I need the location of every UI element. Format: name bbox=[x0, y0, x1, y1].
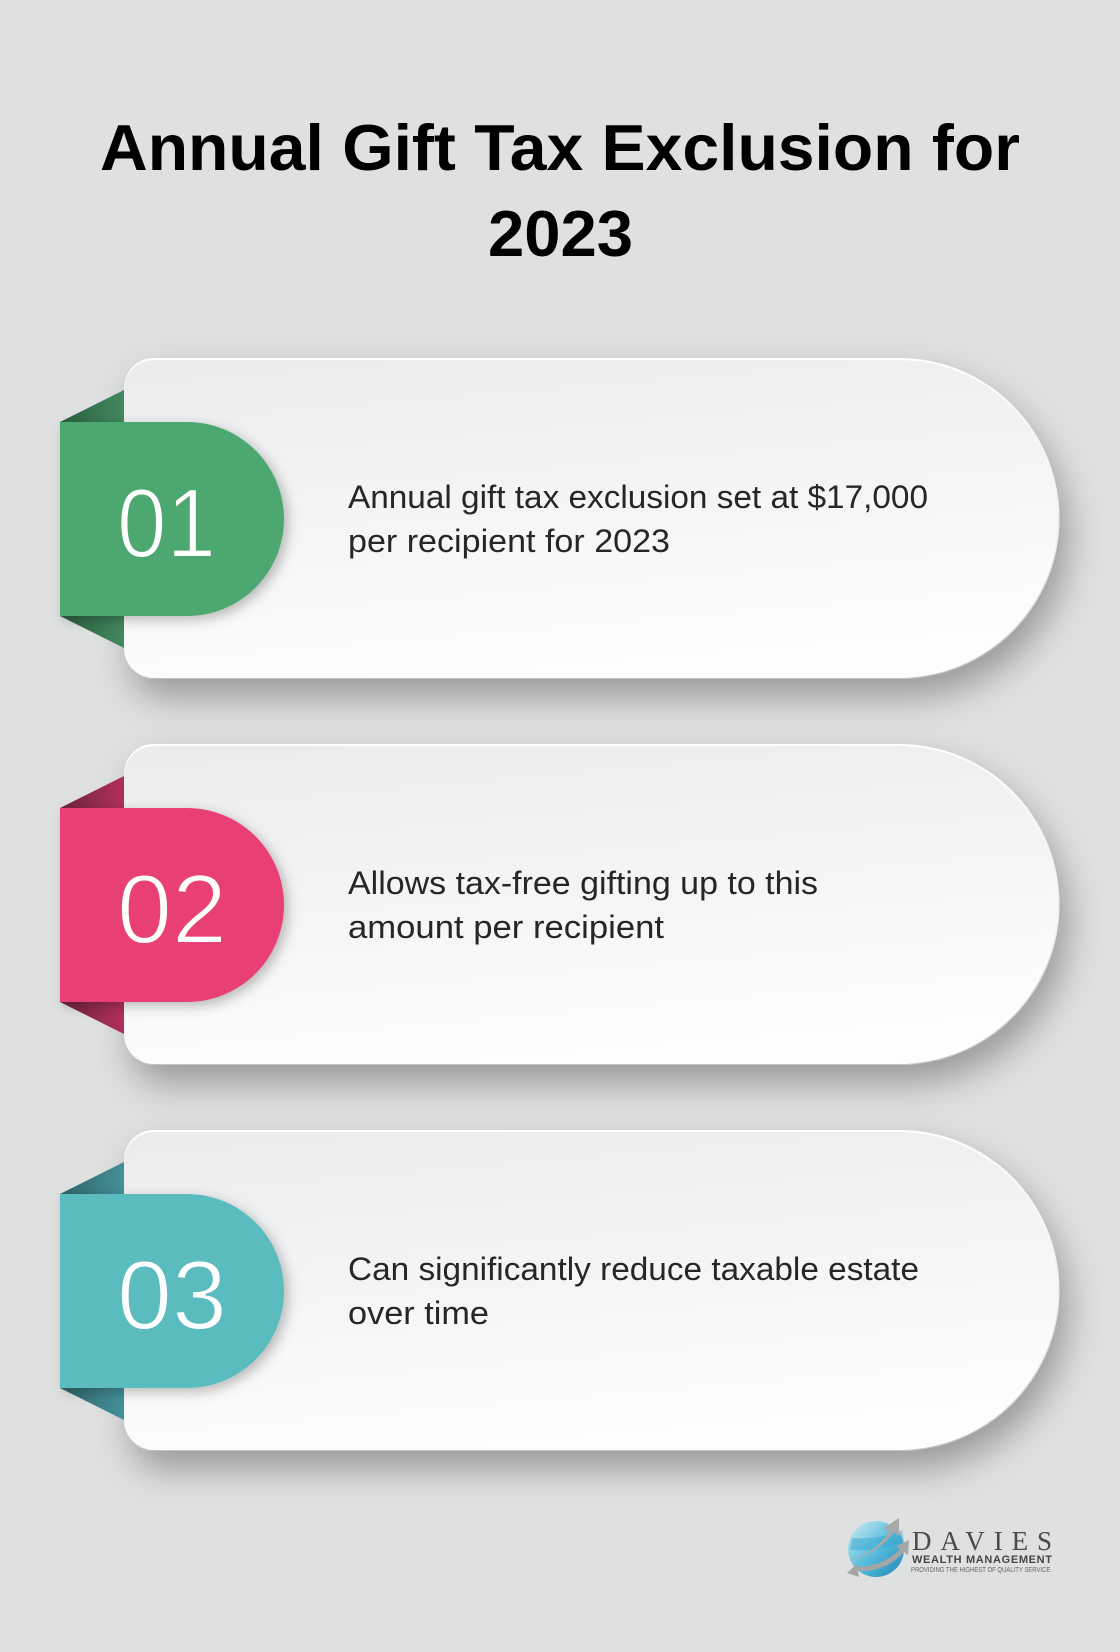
logo subtitle: WEALTH MANAGEMENT bbox=[912, 1554, 1052, 1566]
ribbon folds 01 bbox=[60, 390, 124, 648]
title: 2023 bbox=[488, 197, 633, 270]
logo: Davies Wealth Management bbox=[847, 1518, 1052, 1577]
panel: item 02 bbox=[60, 744, 1060, 1065]
panel: item 01 bbox=[60, 358, 1059, 679]
card 03 bbox=[124, 1130, 1059, 1451]
text 03: over time bbox=[348, 1295, 489, 1331]
card 02 bbox=[124, 744, 1060, 1065]
logo tagline: PROVIDING THE HIGHEST OF QUALITY SERVICE. bbox=[911, 1567, 1052, 1574]
number 02: 02 bbox=[117, 854, 227, 964]
text 02: amount per recipient bbox=[348, 909, 664, 945]
title: Annual Gift Tax Exclusion for bbox=[100, 111, 1020, 184]
logo wordmark: DAVIES bbox=[912, 1526, 1052, 1556]
panel: item 03 bbox=[60, 1130, 1059, 1451]
title bbox=[100, 111, 1020, 270]
badge 02 bbox=[60, 808, 284, 1002]
text 02: Allows tax-free gifting up to this bbox=[348, 865, 818, 901]
badge 03 bbox=[60, 1194, 284, 1388]
ribbon folds 03 bbox=[60, 1162, 124, 1420]
icon: globe with arrows bbox=[847, 1518, 909, 1577]
badge 01 bbox=[60, 422, 284, 616]
number 03: 03 bbox=[117, 1240, 227, 1350]
text 01: per recipient for 2023 bbox=[348, 523, 670, 559]
card 01 bbox=[124, 358, 1059, 679]
ribbon folds 02 bbox=[60, 776, 124, 1034]
number 01: 01 bbox=[117, 468, 216, 578]
text 03: Can significantly reduce taxable estate bbox=[348, 1251, 919, 1287]
text 01: Annual gift tax exclusion set at $17,000 bbox=[348, 479, 928, 515]
